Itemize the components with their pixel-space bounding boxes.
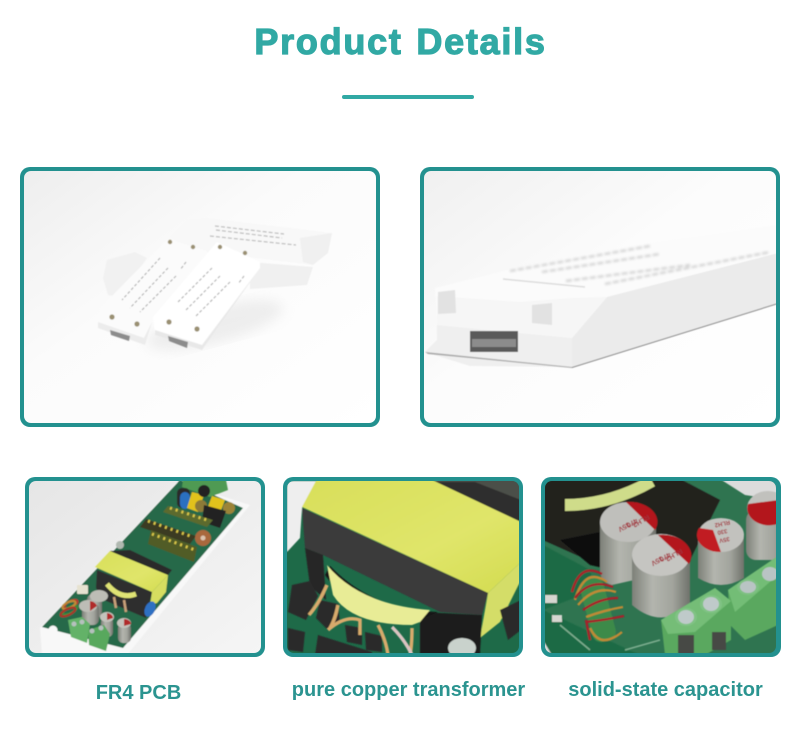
mounting notches <box>438 290 456 314</box>
capacitor top <box>447 637 477 653</box>
yellow bobbin tape <box>327 565 430 625</box>
capacitor 4 <box>746 490 776 561</box>
title: Product Details <box>254 21 547 62</box>
capacitor 3: 330 <box>716 527 728 535</box>
dark background parts <box>545 481 720 558</box>
black core front <box>302 508 488 615</box>
capacitor 2: RLH2 <box>664 547 683 562</box>
terminal block top <box>182 480 228 497</box>
connector slot <box>470 331 518 352</box>
rear driver <box>192 225 332 264</box>
stacked driver behind <box>250 262 313 289</box>
left end piece <box>106 258 145 295</box>
capacitor 1: RLH2 <box>631 513 650 528</box>
panel: white drivers group photo <box>20 167 380 427</box>
white housing <box>40 482 250 655</box>
capacitor 3 <box>697 518 744 585</box>
green screw terminal left <box>661 588 731 655</box>
capacitor 1 <box>600 502 657 585</box>
capacitor 2: 35V <box>649 554 664 567</box>
caption: pure copper transformer: pure copper transformer <box>292 679 525 701</box>
caption: solid-state capacitor: solid-state capacitor <box>568 679 763 701</box>
copper wires <box>309 585 412 655</box>
green board <box>42 480 243 648</box>
board bottom <box>545 610 636 653</box>
panel: FR4 PCB photo <box>25 477 265 657</box>
filter components <box>177 485 235 528</box>
transformer <box>95 550 172 618</box>
driver body <box>425 254 776 368</box>
coil inductor <box>572 571 624 644</box>
capacitor 1: 35V <box>616 520 631 533</box>
capacitor 2: 470 <box>658 550 672 562</box>
bobbin dark arc <box>325 566 438 620</box>
screw terminals <box>68 617 110 651</box>
front right driver <box>153 242 260 350</box>
light pcb traces <box>560 625 660 650</box>
yellow tape top <box>302 479 521 593</box>
capacitors <box>79 590 131 643</box>
tape side <box>480 562 521 638</box>
copper toroid <box>195 530 211 546</box>
capacitor 3: 35V <box>718 535 730 543</box>
front left driver <box>98 239 196 344</box>
capacitor 3: RLH2 <box>713 518 730 528</box>
caption: FR4 PCB: FR4 PCB <box>96 682 181 704</box>
panel: driver close-up photo <box>420 167 780 427</box>
white background wedge <box>287 481 318 552</box>
panel: copper transformer photo <box>283 477 523 658</box>
yellow bobbin <box>565 481 652 505</box>
panel: solid-state capacitor photo <box>541 477 789 657</box>
resistor rows <box>140 506 213 562</box>
dark components <box>288 581 521 655</box>
title underline <box>342 95 474 99</box>
inductor <box>59 598 79 618</box>
blue capacitor <box>144 600 156 618</box>
green screw terminal right <box>728 556 778 640</box>
capacitor 1: 470 <box>625 516 639 528</box>
capacitor 2 <box>632 534 691 618</box>
